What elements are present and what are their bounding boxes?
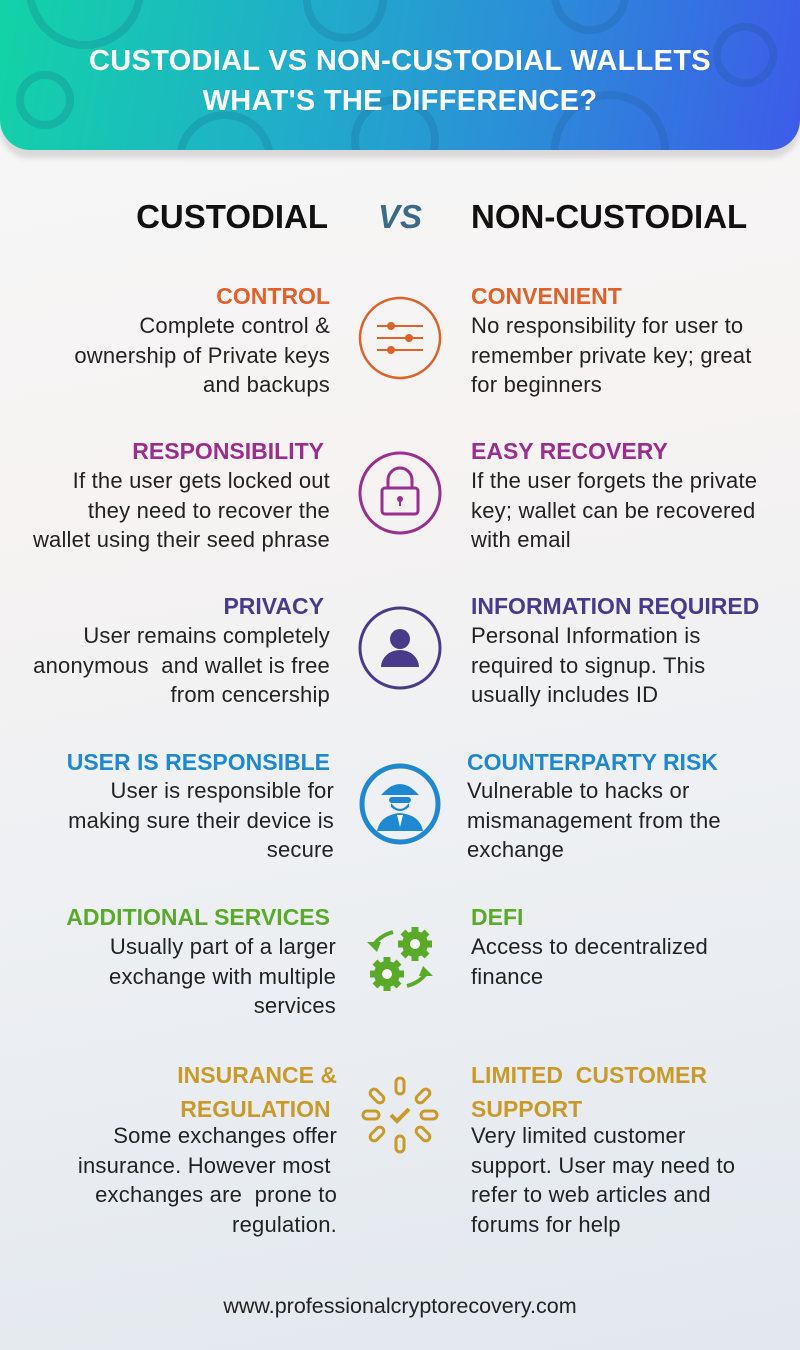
row 6 left text: insurance. However most: [78, 1152, 331, 1178]
row 4 right text: [467, 778, 721, 862]
row 2 left text: they need to recover the: [88, 498, 330, 522]
row 1 left text: [74, 313, 330, 397]
icon: gears: [367, 927, 433, 991]
row 2 right text: key; wallet can be recovered: [471, 498, 755, 522]
row 2 right text: [471, 468, 757, 552]
row 3 right heading: INFORMATION REQUIRED: [471, 593, 759, 619]
row 4 left text: making sure their device is: [68, 808, 334, 832]
row 5 left text: services: [254, 993, 336, 1018]
column header: custodial: CUSTODIAL: [136, 198, 328, 235]
row 6 left text: Some exchanges offer: [113, 1123, 337, 1148]
title: [89, 45, 711, 117]
row 5 right text: [471, 934, 708, 988]
row 5 right heading: DEFI: [471, 904, 523, 930]
icon: sliders: [358, 296, 442, 380]
footer url: www.professionalcryptorecovery.com: [223, 1294, 577, 1318]
row 1 left text: Complete control &: [139, 313, 330, 338]
row 6 right text: [471, 1123, 735, 1236]
row 6 left heading: [177, 1062, 337, 1122]
row 2 right text: If the user forgets the private: [471, 468, 757, 493]
row 6 left text: [78, 1123, 337, 1236]
row 6 right text: support. User may need to: [471, 1152, 735, 1178]
row 1 left text: and backups: [203, 372, 330, 397]
icon: user: [358, 606, 442, 690]
row 5 right text: Access to decentralized: [471, 934, 708, 959]
row 1 right text: for beginners: [471, 372, 602, 397]
row 3 right text: required to signup. This: [471, 652, 705, 678]
row 6 left text: regulation.: [232, 1212, 337, 1236]
row 2 right heading: EASY RECOVERY: [471, 438, 668, 464]
icon: hacker: [360, 764, 440, 844]
row 4 right text: mismanagement from the: [467, 808, 721, 832]
icon: lock: [358, 452, 442, 534]
row 5 left text: exchange with multiple: [109, 964, 336, 988]
row 1 right text: remember private key; great: [471, 342, 752, 368]
row 4 right text: exchange: [467, 837, 564, 862]
column header: non-custodial: NON-CUSTODIAL: [471, 198, 747, 235]
row 1 right text: [471, 313, 752, 397]
row 6 left text: exchanges are prone to: [95, 1182, 337, 1207]
row 6 left heading: INSURANCE &: [177, 1062, 337, 1088]
row 4 left text: User is responsible for: [111, 778, 334, 803]
row 3 left text: anonymous and wallet is free: [33, 652, 330, 678]
row 1 right text: No responsibility for user to: [471, 313, 743, 338]
row 6 right text: Very limited customer: [471, 1123, 686, 1148]
row 5 right text: finance: [471, 964, 543, 988]
row 1 right heading: CONVENIENT: [471, 283, 622, 309]
row 3 left text: User remains completely: [83, 623, 330, 648]
row 4 right heading: COUNTERPARTY RISK: [467, 749, 718, 775]
title: CUSTODIAL VS NON-CUSTODIAL WALLETS: [89, 45, 711, 77]
row 3 right text: Personal Information is: [471, 623, 701, 648]
row 3 right text: [471, 623, 705, 707]
row 2 left text: wallet using their seed phrase: [33, 527, 330, 552]
row 5 left heading: ADDITIONAL SERVICES: [66, 904, 330, 930]
title: WHAT'S THE DIFFERENCE?: [203, 85, 597, 117]
row 1 left text: ownership of Private keys: [74, 342, 330, 368]
icon: check burst: [362, 1076, 438, 1154]
row 2 left heading: RESPONSIBILITY: [132, 438, 324, 464]
row 5 left text: Usually part of a larger: [110, 934, 336, 959]
row 4 left heading: USER IS RESPONSIBLE: [67, 749, 330, 775]
row 3 left text: from cencership: [170, 682, 330, 707]
row 6 right heading: LIMITED CUSTOMER: [471, 1062, 707, 1088]
row 6 right text: forums for help: [471, 1212, 621, 1236]
row 1 left heading: CONTROL: [216, 283, 330, 309]
header banner: [0, 0, 800, 150]
vs: VS: [378, 198, 422, 235]
row 4 left text: [68, 778, 334, 862]
row 6 right heading: [471, 1062, 707, 1122]
row 4 left text: secure: [267, 837, 334, 862]
row 6 left heading: REGULATION: [180, 1096, 331, 1122]
row 4 right text: Vulnerable to hacks or: [467, 778, 690, 803]
row 3 right text: usually includes ID: [471, 682, 658, 707]
row 3 left text: [33, 623, 330, 707]
row 6 right text: refer to web articles and: [471, 1182, 711, 1207]
row 2 left text: [33, 468, 330, 552]
row 2 left text: If the user gets locked out: [73, 468, 330, 493]
row 2 right text: with email: [471, 527, 571, 552]
row 3 left heading: PRIVACY: [223, 593, 324, 619]
row 5 left text: [109, 934, 336, 1018]
row 6 right heading: SUPPORT: [471, 1096, 582, 1122]
